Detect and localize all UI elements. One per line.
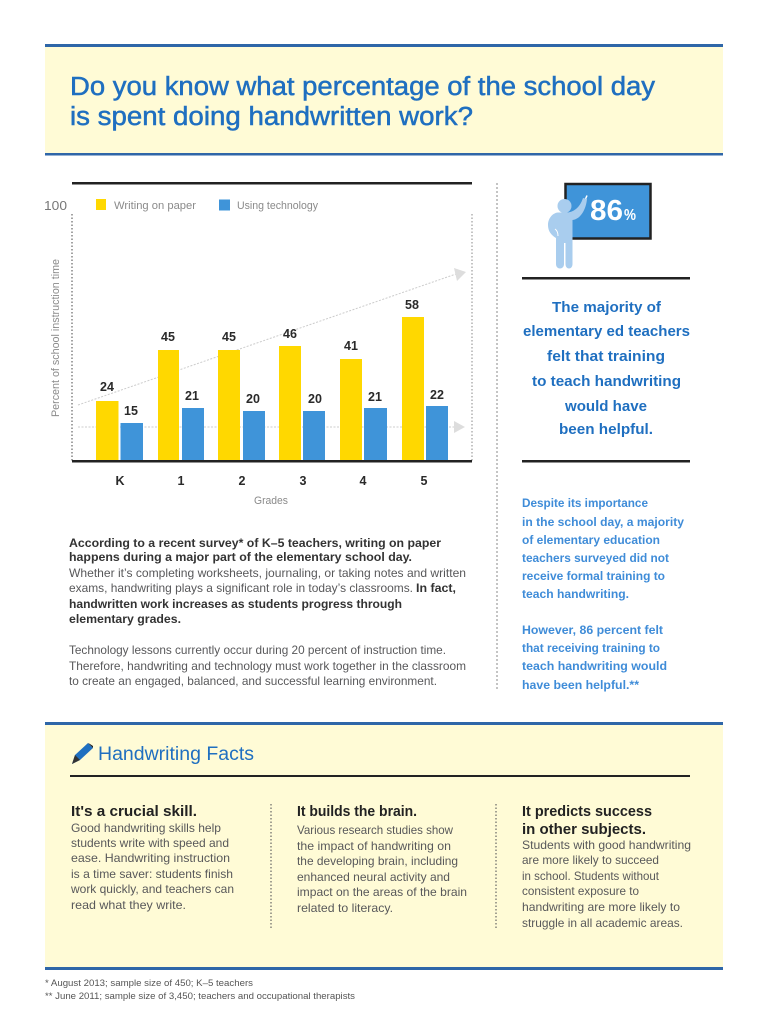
fact: predicts success: It predicts success <box>522 803 652 820</box>
text block: survey findings: exams, handwriting plays a significant role in today’s classrooms. <box>69 581 413 595</box>
arrow: flat technology trend <box>78 421 465 433</box>
fact: builds the brain: the developing brain, including <box>297 854 458 868</box>
text block: survey findings <box>69 536 466 688</box>
fact: crucial skill: students write with speed and <box>71 836 229 850</box>
icon: teacher pointing at 86% board: % <box>624 207 636 224</box>
fact: predicts success: in school. Students without <box>522 869 660 883</box>
bar value labels: 21 <box>368 390 382 404</box>
footnotes: ** June 2011; sample size of 3,450; teachers and occupational therapists <box>45 991 355 1002</box>
text block: survey findings: In fact, <box>416 581 456 595</box>
arrow: rising writing trend <box>78 268 466 405</box>
grade labels: K <box>115 474 125 488</box>
text block: formal training: Despite its importance <box>522 496 648 510</box>
text block: survey findings: Whether it’s completing worksheets, journaling, or taking notes and written <box>69 566 466 580</box>
fact: predicts success: are more likely to succeed <box>522 853 659 867</box>
bar value labels: 21 <box>185 389 199 403</box>
panel: handwriting facts <box>45 722 723 970</box>
grade labels <box>115 474 428 488</box>
icon: teacher pointing at 86% board: 86 <box>590 195 623 227</box>
bar chart: percent of instruction time by grade <box>44 182 472 507</box>
fact: builds the brain: impact on the areas of the brain <box>297 885 467 899</box>
fact: crucial skill: Good handwriting skills help <box>71 821 221 835</box>
bar value labels: 22 <box>430 388 444 402</box>
text block: survey findings: Therefore, handwriting and technology must work together in the classroom <box>69 659 466 673</box>
fact: crucial skill: ease. Handwriting instruction <box>71 851 230 865</box>
callout: majority of teachers: been helpful. <box>559 422 653 438</box>
text block: survey findings: happens during a major part of the elementary school day. <box>69 550 412 564</box>
text block: survey findings: Technology lessons currently occur during 20 percent of instruction time. <box>69 643 446 657</box>
fact: crucial skill: is a time saver: students finish <box>71 867 233 881</box>
axis maximum label: 100 <box>44 198 67 213</box>
fact: predicts success: struggle in all academic areas. <box>522 916 683 930</box>
fact: builds the brain: the impact of handwriting on <box>297 839 451 853</box>
fact: crucial skill <box>70 803 234 912</box>
bar value labels: 46 <box>283 327 297 341</box>
fact: crucial skill: read what they write. <box>71 898 186 912</box>
callout: majority of teachers: felt that training <box>547 349 665 365</box>
fact: predicts success: consistent exposure to <box>522 884 639 898</box>
fact: crucial skill: work quickly, and teachers can <box>70 882 234 896</box>
bar value labels: 20 <box>246 392 260 406</box>
bar value labels <box>100 298 444 418</box>
title: is spent doing handwritten work? <box>70 103 473 131</box>
text block: formal training <box>522 496 684 692</box>
fact: builds the brain <box>297 803 467 915</box>
bar value labels: 45 <box>222 330 236 344</box>
text block: survey findings: elementary grades. <box>69 612 181 626</box>
facts heading: Handwriting Facts <box>98 744 254 765</box>
text block: formal training: teach handwriting would <box>522 659 667 673</box>
callout: majority of teachers: to teach handwriting <box>532 374 681 390</box>
bar value labels: 15 <box>124 404 138 418</box>
grade labels: 5 <box>421 474 428 488</box>
text block: survey findings: handwritten work increases as students progress through <box>69 597 402 611</box>
grade labels: 3 <box>300 474 307 488</box>
grade labels: 4 <box>360 474 367 488</box>
text block: formal training: teachers surveyed did not <box>522 551 669 565</box>
grade labels: 1 <box>178 474 185 488</box>
title <box>70 73 655 131</box>
footnotes <box>45 978 355 1002</box>
text block: survey findings: to create an engaged, balanced, and successful learning environment. <box>69 674 437 688</box>
fact: builds the brain: Various research studies show <box>297 823 453 837</box>
text block: formal training: teach handwriting. <box>522 587 629 601</box>
fact: builds the brain: related to literacy. <box>297 901 393 915</box>
bar value labels: 41 <box>344 339 358 353</box>
y axis title: Percent of school instruction time <box>50 259 62 417</box>
text block: formal training: have been helpful.** <box>522 678 639 692</box>
text block: formal training: that receiving training to <box>522 641 660 655</box>
callout: majority of teachers: would have <box>564 399 647 415</box>
fact: builds the brain: enhanced neural activity and <box>297 870 450 884</box>
icon: pencil <box>72 743 93 764</box>
footnotes: * August 2013; sample size of 450; K–5 teachers <box>45 978 253 989</box>
callout: majority of teachers <box>523 300 690 438</box>
legend: Using technology <box>237 200 318 212</box>
text block: formal training: of elementary education <box>522 533 660 547</box>
fact: predicts success: handwriting are more likely to <box>522 900 680 914</box>
callout: majority of teachers: elementary ed teachers <box>523 324 690 340</box>
text block: survey findings: According to a recent survey* of K–5 teachers, writing on paper <box>69 536 441 550</box>
legend: Writing on paper <box>114 200 196 212</box>
fact: predicts success: in other subjects. <box>522 821 646 838</box>
bar value labels: 20 <box>308 392 322 406</box>
legend <box>96 199 318 212</box>
bars <box>96 317 448 461</box>
fact: predicts success <box>522 803 691 930</box>
panel: title banner <box>45 44 723 156</box>
fact: predicts success: Students with good handwriting <box>522 838 691 852</box>
fact: crucial skill: It's a crucial skill. <box>71 803 197 820</box>
title: Do you know what percentage of the school day <box>70 73 655 101</box>
text block: formal training: receive formal training to <box>522 569 665 583</box>
bar value labels: 24 <box>100 380 114 394</box>
x axis title: Grades <box>254 495 288 507</box>
grade labels: 2 <box>239 474 246 488</box>
icon: teacher pointing at 86% board <box>548 184 650 268</box>
callout: majority of teachers: The majority of <box>552 300 661 316</box>
bar value labels: 58 <box>405 298 419 312</box>
text block: formal training: However, 86 percent felt <box>522 623 663 637</box>
text block: formal training: in the school day, a majority <box>522 515 684 529</box>
fact: builds the brain: It builds the brain. <box>297 803 417 820</box>
bar value labels: 45 <box>161 330 175 344</box>
